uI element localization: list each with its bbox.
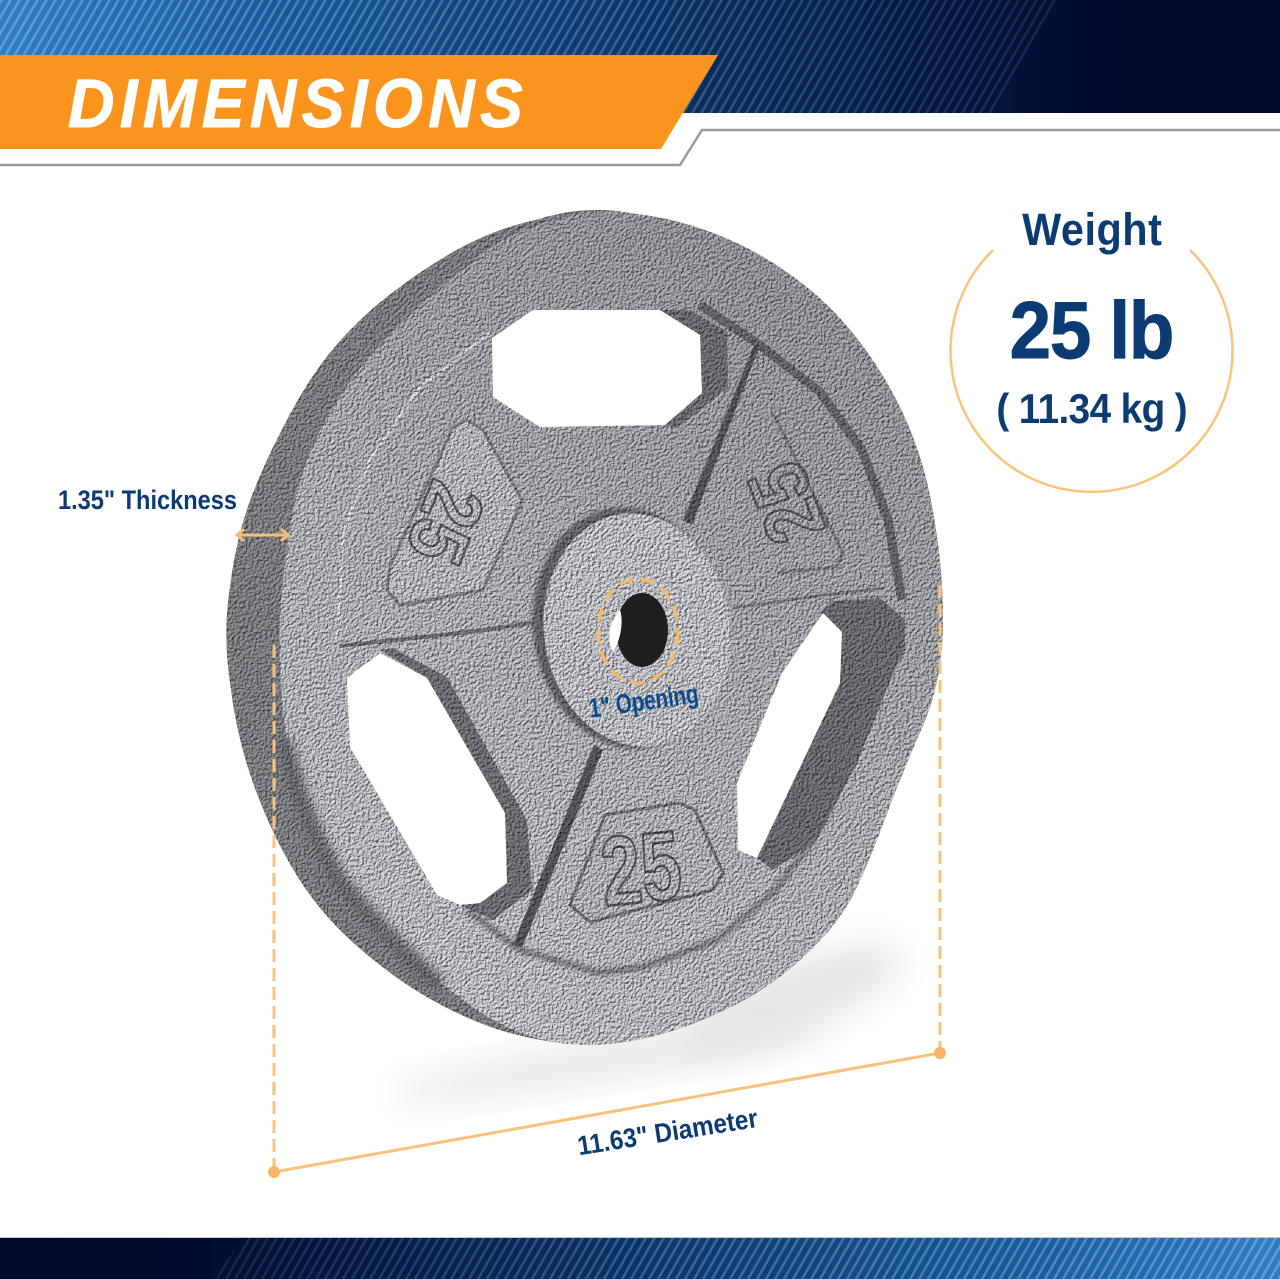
rim channel right [700, 305, 902, 600]
left badge [387, 420, 522, 605]
embossed number right: 25 [731, 450, 843, 556]
window right [737, 613, 842, 858]
bottom gradient band [0, 1238, 1280, 1279]
ground shadow [389, 922, 915, 1116]
plate edge thickness [226, 210, 943, 1045]
spoke groove right [733, 588, 883, 608]
window left [347, 653, 507, 905]
spoke groove top [683, 343, 760, 525]
window wall top [660, 310, 728, 428]
weight value lb: 25 lb [1010, 286, 1174, 376]
spoke groove left [340, 622, 538, 646]
inner ridge left [337, 333, 490, 640]
weight circle arc [950, 250, 1232, 492]
banner outline [0, 130, 1280, 165]
embossed number left: 25 [388, 470, 502, 576]
rim channel bottom [467, 840, 813, 973]
orange title ribbon [0, 55, 718, 149]
window wall right [757, 598, 905, 870]
plate casting [226, 210, 943, 1045]
weight value kg: ( 11.34 kg ) [996, 384, 1188, 432]
lower-left rim shadow [285, 740, 440, 985]
right badge [773, 413, 843, 573]
bottom badge [570, 803, 723, 922]
weight heading: Weight [1022, 205, 1162, 255]
diameter left guide [272, 645, 276, 1172]
thickness arrow [237, 529, 288, 541]
window wall left [380, 648, 532, 920]
weight plate [226, 210, 943, 1045]
hub shadow [517, 495, 741, 761]
diameter left end dot [268, 1166, 280, 1178]
diameter baseline [274, 1053, 940, 1172]
diameter label: 11.63" Diameter [575, 1103, 760, 1161]
plate front face [280, 211, 943, 1045]
bottom band hairline [0, 1236, 1280, 1238]
spoke groove bottom [513, 745, 603, 948]
diameter dimension lines [274, 585, 940, 1172]
hub [529, 501, 745, 759]
window top [492, 310, 702, 427]
opening label: 1" Opening [587, 679, 700, 724]
center hole [609, 593, 668, 667]
diameter right end dot [934, 1047, 946, 1059]
title: DIMENSIONS [68, 66, 523, 143]
embossed number bottom: 25 [595, 809, 687, 927]
top gradient banner [0, 0, 1280, 113]
thickness label: 1.35" Thickness [58, 485, 237, 515]
opening dashed circle [598, 579, 678, 683]
diameter right guide [938, 585, 942, 1053]
